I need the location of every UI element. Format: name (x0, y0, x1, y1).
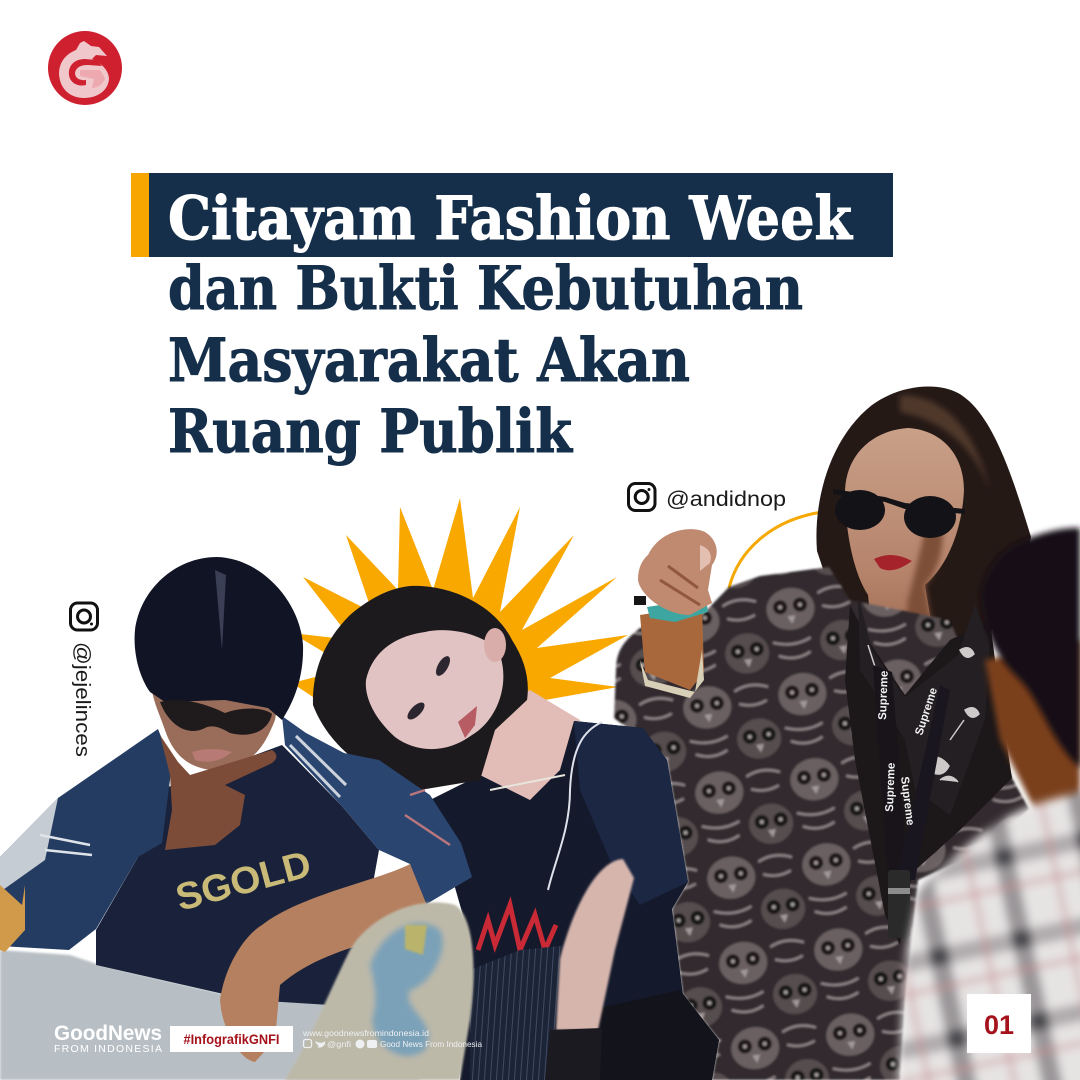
title line 1: Citayam Fashion Week (168, 184, 853, 254)
logo: GNFI red circle (48, 31, 122, 105)
arm (556, 859, 634, 1030)
hair (135, 557, 303, 720)
eyes (405, 700, 427, 722)
bracelet (647, 598, 708, 622)
title line 4: Ruang Publik (168, 397, 573, 467)
lanyard: Supreme (884, 762, 898, 812)
footer logo: GoodNews From Indonesia: GoodNews (54, 1021, 162, 1045)
jacket right sleeve (282, 716, 472, 905)
face (152, 680, 280, 770)
jacket with owl print (614, 567, 1029, 1080)
instagram handle: andidnop (628, 484, 786, 511)
pants (470, 945, 570, 1080)
page number (967, 994, 1031, 1053)
shirt and right jacket panel (96, 745, 379, 1005)
black shirt (845, 605, 1012, 945)
earphone cable (548, 722, 602, 890)
lanyard (873, 665, 950, 938)
plaid shirt (898, 789, 1080, 1080)
arm and hand (220, 864, 435, 1062)
title line 3: Masyarakat Akan (168, 326, 690, 396)
hair (816, 387, 1031, 640)
sunglasses (833, 489, 965, 538)
footer contact details (302, 1028, 482, 1049)
footer logo: GoodNews From Indonesia: FROM INDONESIA (54, 1043, 162, 1055)
sunglasses (160, 700, 272, 735)
lips (458, 706, 477, 738)
title accent bar (131, 173, 149, 257)
footer contact details: @gnfi (327, 1039, 351, 1049)
face and neck (845, 428, 964, 695)
footer logo: GoodNews From Indonesia (54, 1021, 162, 1055)
hashtag label: #InfografikGNFI (184, 1032, 280, 1047)
lanyard: Supreme (877, 670, 891, 720)
jacket emblem (0, 885, 25, 952)
bandana (858, 595, 990, 815)
social icons (304, 1040, 377, 1048)
instagram handle: jejelinces (70, 603, 98, 757)
hashtag label (170, 1026, 293, 1052)
forearm (640, 605, 704, 690)
lanyard: Supreme (898, 776, 916, 826)
sunburst (292, 498, 628, 760)
instagram handle: jejelinces: @jejelinces (71, 642, 93, 757)
title line 2: dan Bukti Kebutuhan (168, 254, 803, 324)
title highlight band (149, 173, 893, 257)
icon: instagram rotated (70, 603, 98, 630)
shirt graphic (478, 905, 556, 950)
head (981, 528, 1080, 768)
jacket left panel (0, 729, 172, 950)
cuff (545, 1028, 602, 1080)
neck (985, 640, 1080, 820)
lanyard: Supreme (913, 686, 940, 737)
lips (874, 555, 912, 570)
shirt (430, 721, 719, 1080)
icon: instagram (628, 484, 655, 510)
instagram handle: andidnop: @andidnop (666, 488, 786, 511)
arrow: orange curve to person (729, 512, 822, 588)
hair (313, 586, 528, 790)
title block (131, 173, 893, 467)
footer contact details: Good News From Indonesia (380, 1039, 482, 1049)
fist (638, 529, 717, 615)
trousers (0, 950, 420, 1080)
photo: person in foreground (blurred) (898, 528, 1080, 1080)
shirt lettering: SGOLD (171, 843, 316, 920)
photo: girl with earphones (313, 586, 719, 1080)
shirt sleeve (574, 721, 688, 905)
trouser knee with dragon print (285, 902, 474, 1080)
necklace (490, 775, 565, 790)
photo: boy with sunglasses (0, 557, 474, 1080)
hand on chin (160, 735, 276, 850)
ear (484, 628, 506, 662)
photo: woman with sunglasses (Andi) (614, 387, 1031, 1080)
footer contact details: www.goodnewsfromindonesia.id (302, 1028, 429, 1038)
lips (192, 749, 232, 762)
page number: 01 (984, 1010, 1014, 1040)
neck and chest (470, 690, 580, 800)
face (366, 630, 503, 749)
